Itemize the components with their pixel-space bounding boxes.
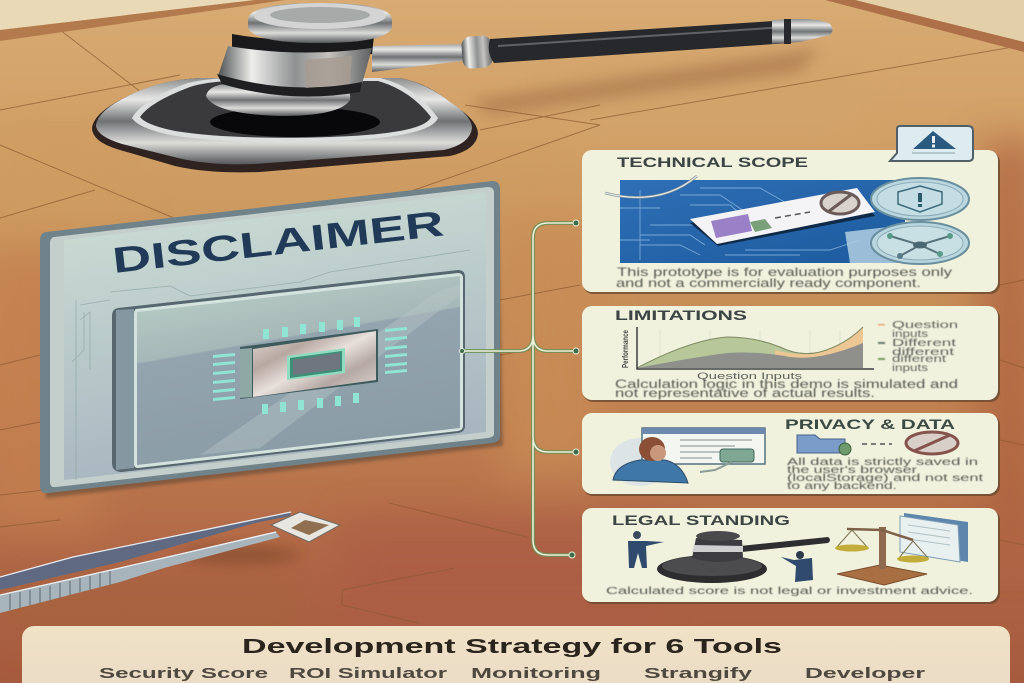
chart legend: inputs xyxy=(892,362,928,374)
chart y-axis label: Performance xyxy=(621,330,630,368)
tool names row: ROI Simulator xyxy=(289,665,447,682)
description: technical scope: This prototype is for evaluation purposes only xyxy=(617,265,952,279)
disclaimer heading: DISCLAIMER xyxy=(110,203,446,281)
description: privacy and data: the user's browser xyxy=(787,465,918,476)
description: privacy and data: (localStorage) and not sent xyxy=(787,473,983,484)
panel: privacy and data xyxy=(582,413,1000,496)
chart legend: different xyxy=(892,346,954,358)
chart legend: different xyxy=(892,353,946,365)
chip icon xyxy=(213,317,407,414)
chart legend: inputs xyxy=(892,328,928,340)
tool names row: Security Score xyxy=(99,665,268,682)
gavel handle xyxy=(372,19,832,72)
chart legend: Question xyxy=(892,319,958,331)
gavel sound block xyxy=(92,78,478,172)
heading: technical scope: TECHNICAL SCOPE xyxy=(617,154,808,170)
figure right xyxy=(781,551,813,582)
description: privacy and data: to any backend. xyxy=(787,481,897,492)
alert speech bubble xyxy=(890,126,973,161)
area chart xyxy=(621,327,874,381)
description: privacy and data xyxy=(787,457,983,492)
shield badge xyxy=(871,178,969,220)
legal gavel xyxy=(657,531,830,583)
description: technical scope: and not a commercially ready component. xyxy=(616,276,921,290)
chart legend: Different xyxy=(892,337,956,349)
description: privacy and data: All data is strictly saved in xyxy=(787,457,978,468)
disclaimer plate xyxy=(40,181,503,498)
description: limitations: Calculation logic in this demo is simulated and xyxy=(615,379,958,391)
heading: limitations: LIMITATIONS xyxy=(615,307,747,323)
description: limitations xyxy=(615,379,958,400)
panel: limitations xyxy=(582,306,1000,402)
description: technical scope xyxy=(616,265,952,290)
tool names row: Monitoring xyxy=(471,665,601,682)
connector lines from plate to cards xyxy=(460,220,579,558)
network badge xyxy=(871,222,969,264)
tweezers holding a small chip xyxy=(0,512,340,613)
person at browser illustration xyxy=(610,428,765,486)
tool names row: Strangify xyxy=(644,665,753,682)
panel: development strategy xyxy=(22,626,1010,683)
panel: technical scope xyxy=(582,150,1000,294)
inner glass panel xyxy=(112,270,465,472)
description: limitations: not representative of actual results. xyxy=(615,388,875,400)
panel: legal standing xyxy=(582,508,1000,604)
scales of justice xyxy=(835,527,929,585)
gavel head xyxy=(206,3,392,116)
tool names row: Developer xyxy=(805,665,925,682)
description: legal standing: Calculated score is not legal or investment advice. xyxy=(606,586,973,597)
folder to no-cloud icons xyxy=(797,432,958,455)
tool names row xyxy=(99,665,925,682)
gavel with sound block xyxy=(92,3,832,172)
circuit board illustration xyxy=(605,176,905,263)
no-entry icon on strip xyxy=(821,192,859,214)
figure left xyxy=(628,531,664,568)
heading: privacy and data: PRIVACY & DATA xyxy=(785,416,955,432)
document stack xyxy=(900,513,968,562)
chart x-axis label: Question Inputs xyxy=(697,371,803,381)
heading: development strategy: Development Strategy for 6 Tools xyxy=(242,636,782,658)
chart legend xyxy=(878,319,958,374)
small chip xyxy=(271,512,340,542)
heading: legal standing: LEGAL STANDING xyxy=(612,512,790,528)
